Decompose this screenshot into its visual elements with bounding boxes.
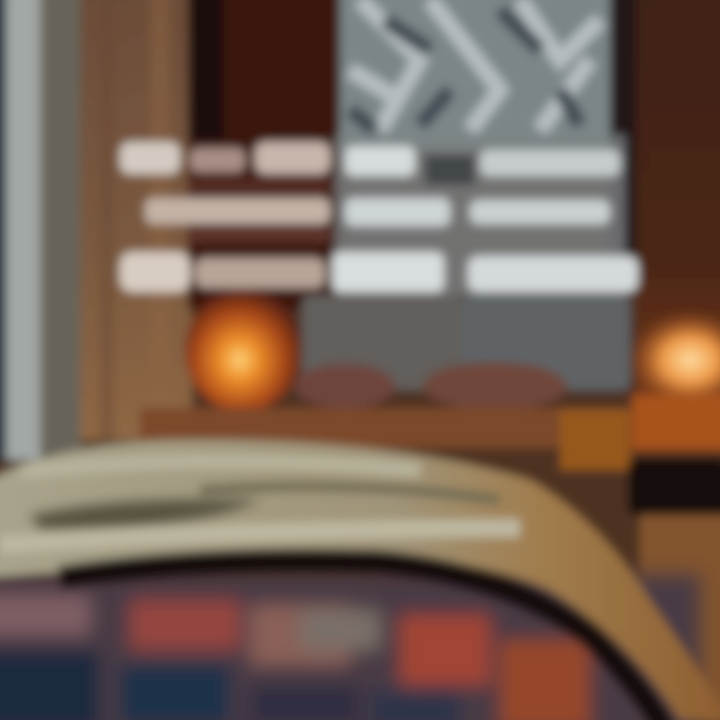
blurred headline bands [120, 135, 638, 295]
wall art panel [340, 0, 610, 150]
right lower table [640, 515, 720, 720]
lamp right [628, 310, 720, 516]
blanket [0, 440, 720, 720]
pillows [295, 295, 630, 410]
quilt [0, 575, 700, 720]
lamp left [185, 288, 301, 412]
dark blanket edge [60, 561, 665, 720]
headboard ledge [140, 408, 630, 470]
